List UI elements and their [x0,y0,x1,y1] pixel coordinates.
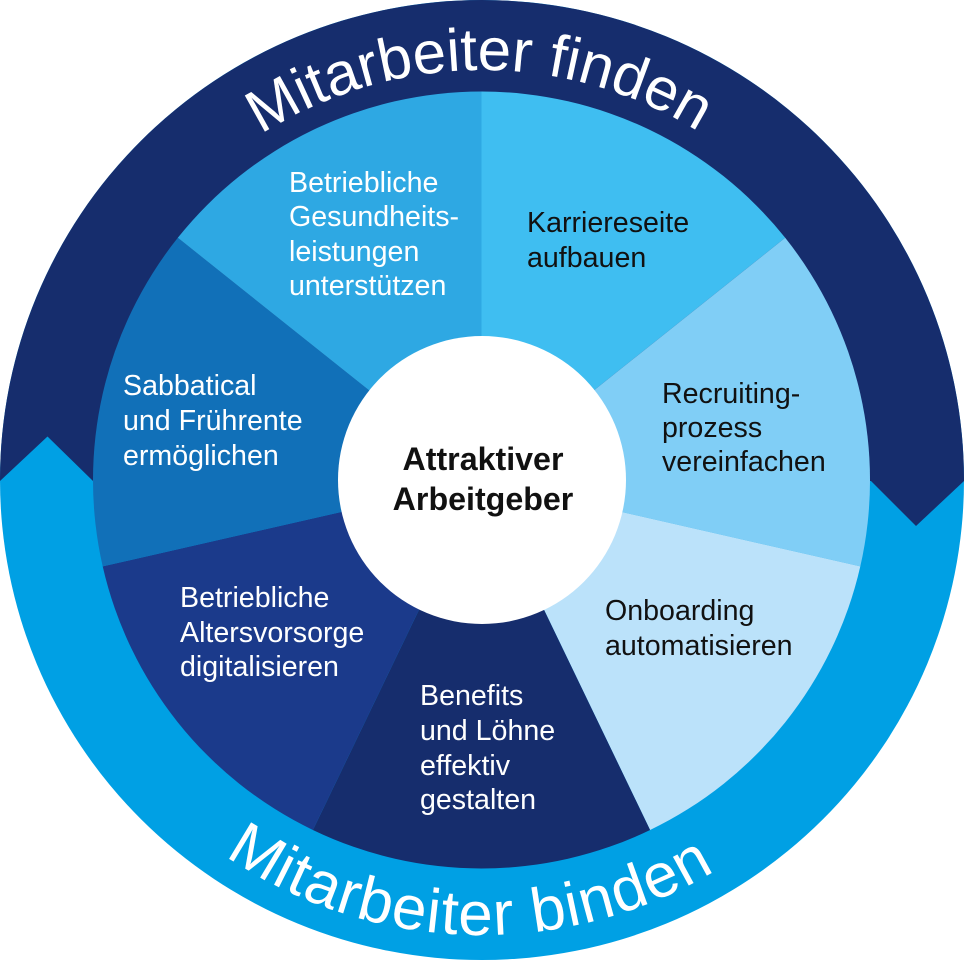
wedge: Betriebliche Altersvorsorge digitalisieren: Altersvorsorge [180,617,364,649]
wedge: Sabbatical und Frührente ermöglichen: Sabbatical [123,370,257,402]
wedge: Recruitingprozess vereinfachen: prozess [662,412,762,444]
center circle: Attraktiver Arbeitgeber: Arbeitgeber [393,481,574,517]
wedge: Onboarding automatisieren: Onboarding [605,595,754,627]
outer ring: Mitarbeiter finden (dark blue with arrowheads) [0,0,964,526]
wedge: Karriereseite aufbauen: aufbauen [527,242,646,274]
wedge: Sabbatical und Frührente ermöglichen: und Frührente [123,405,303,437]
wedge: Karriereseite aufbauen [482,92,785,480]
wedge: Karriereseite aufbauen: Karriereseite [527,207,689,239]
wedge: Benefits und Löhne effektiv gestalten: Benefits [420,680,523,712]
wedge: Recruitingprozess vereinfachen: Recruiting- [662,378,800,410]
wedge: Sabbatical und Frührente ermöglichen [93,238,481,566]
wedge: Betriebliche Gesundheitsleistungen unterstützen: Betriebliche [289,167,438,199]
wedge: Betriebliche Gesundheitsleistungen unterstützen: Gesundheits- [289,201,459,233]
wedge: Recruitingprozess vereinfachen [482,238,870,566]
wedge: Betriebliche Gesundheitsleistungen unterstützen: leistungen [289,236,419,268]
wedge: Betriebliche Gesundheitsleistungen unterstützen [178,92,482,480]
wedge: Betriebliche Gesundheitsleistungen unterstützen: unterstützen [289,270,446,302]
wedge: Betriebliche Altersvorsorge digitalisieren: Betriebliche [180,582,329,614]
wedge: Benefits und Löhne effektiv gestalten: effektiv [420,750,511,782]
wedge: Benefits und Löhne effektiv gestalten [313,480,650,868]
wedge: Onboarding automatisieren: automatisieren [605,630,793,662]
center circle: Attraktiver Arbeitgeber [338,336,626,624]
heading: Mitarbeiter finden: Mitarbeiter finden [244,27,708,132]
wedge: Benefits und Löhne effektiv gestalten: und Löhne [420,715,555,747]
heading: Mitarbeiter binden: Mitarbeiter binden [229,822,712,936]
wedge: Betriebliche Altersvorsorge digitalisieren [103,480,481,830]
center circle: Attraktiver Arbeitgeber: Attraktiver [402,441,564,477]
wedge: Betriebliche Altersvorsorge digitalisieren: digitalisieren [180,651,339,683]
wedge: Benefits und Löhne effektiv gestalten: gestalten [420,784,536,816]
wedge: Recruitingprozess vereinfachen: vereinfachen [662,446,826,478]
wedge: Onboarding automatisieren [482,480,860,830]
wedge: Sabbatical und Frührente ermöglichen: ermöglichen [123,440,279,472]
